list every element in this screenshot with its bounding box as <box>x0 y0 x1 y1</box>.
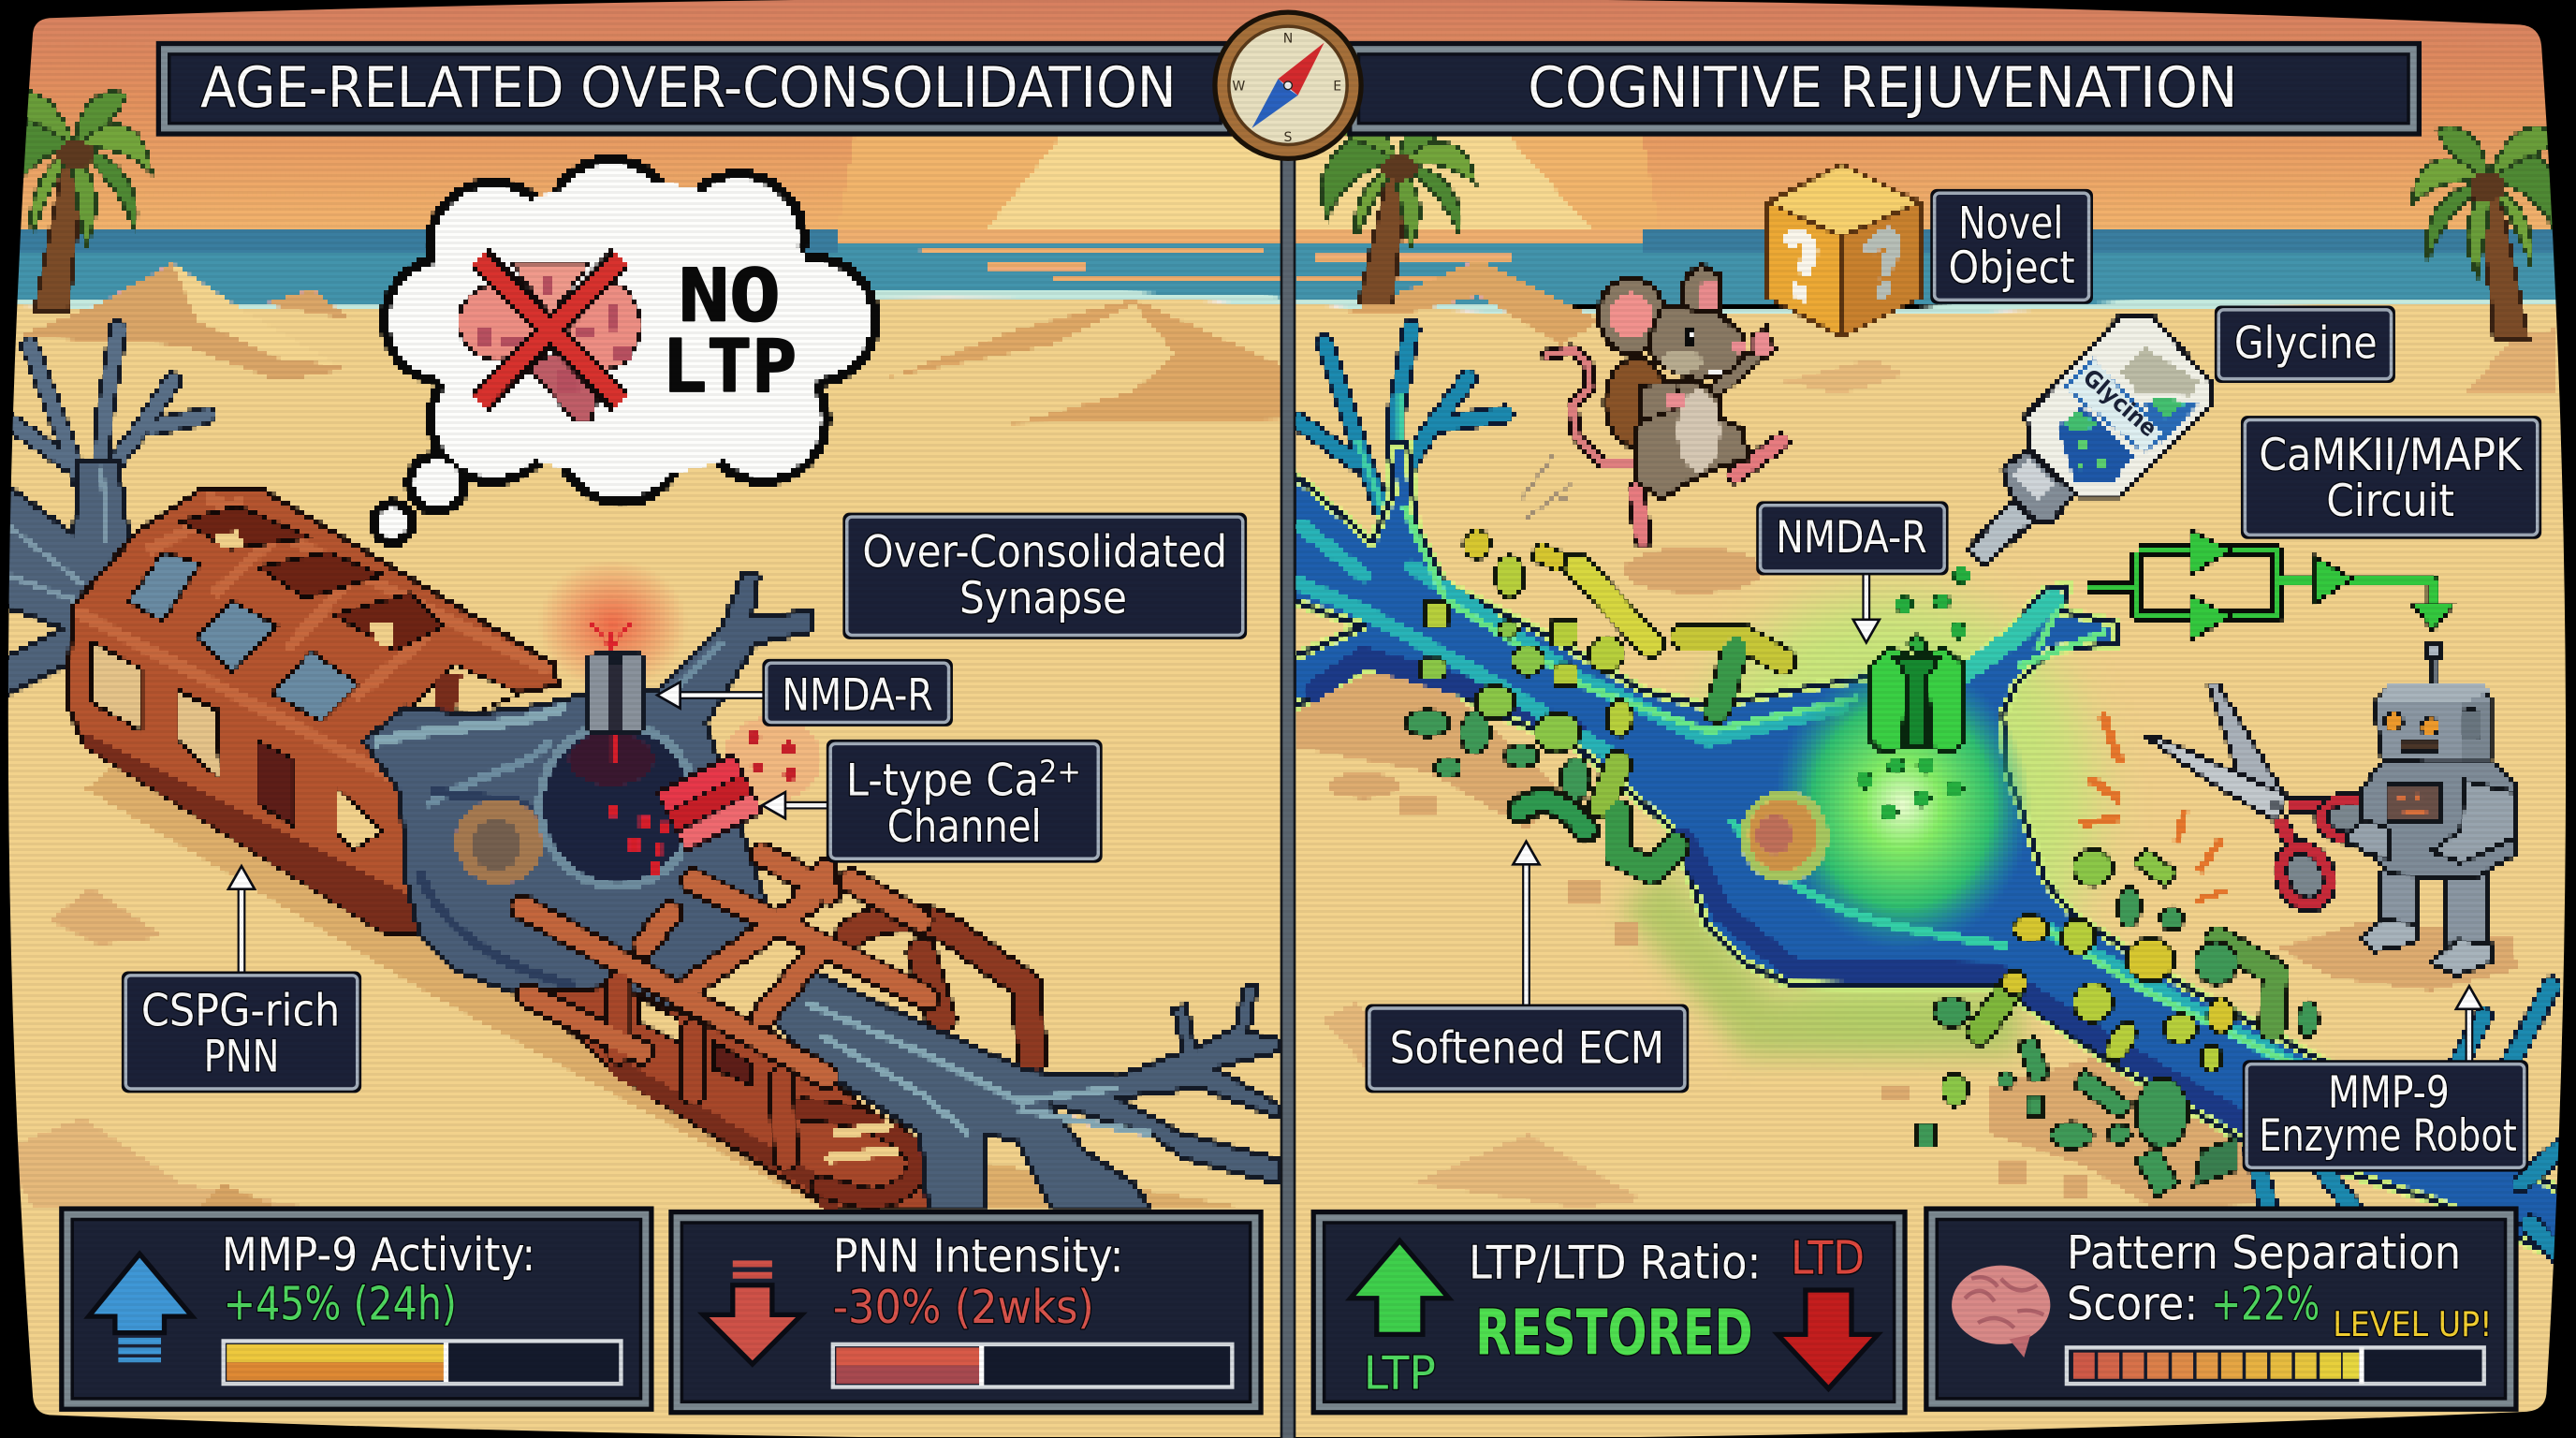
icon: red down arrow <box>703 1260 801 1364</box>
motion lines <box>1519 457 1569 518</box>
dark synapse dome <box>535 720 700 890</box>
panel: PNN intensity <box>668 1210 1264 1415</box>
MMP-9 progress bar <box>224 1341 621 1384</box>
cage highlights <box>76 496 550 779</box>
label: MMP-9 enzyme robot with arrow <box>2243 986 2528 1172</box>
left PNN cage, back section <box>67 490 559 932</box>
label: novel object <box>1930 189 2093 304</box>
cube question marks <box>1781 227 1901 302</box>
ratio heading: LTP/LTD Ratio: <box>1469 1236 1761 1290</box>
header: cognitive rejuvenation <box>1347 41 2422 137</box>
cage windows <box>91 506 520 850</box>
glycine bottle <box>1969 315 2213 565</box>
bottle label text: Glycine <box>2078 363 2162 442</box>
mouse arm <box>1719 352 1761 388</box>
label: L-type Ca channel with arrow <box>762 740 1103 863</box>
sparks <box>2080 712 2228 903</box>
robot legs <box>2361 871 2494 976</box>
restored status: RESTORED <box>1475 1296 1753 1369</box>
sky <box>0 0 2576 233</box>
header: age-related over-consolidation: AGE-RELATED OVER-CONSOLIDATION <box>200 56 1177 121</box>
left PNN cage, front rails <box>522 855 927 1159</box>
label: L-type Ca channel with arrow: Channel <box>887 801 1042 853</box>
score value: +22% <box>2211 1277 2320 1331</box>
crossed-out brain <box>459 258 640 420</box>
softened ECM fragments <box>1406 529 2318 1196</box>
label: L-type Ca channel with arrow: 2+ <box>1039 754 1081 790</box>
panel: LTP/LTD ratio <box>1311 1210 1908 1415</box>
icon: blue up arrow <box>89 1254 192 1333</box>
left dendrite tree <box>0 329 207 698</box>
label: L-type Ca channel with arrow: L-type Ca <box>846 756 1058 807</box>
mouse ears <box>1680 265 1721 313</box>
sea <box>0 230 2576 313</box>
L-type calcium channel <box>654 716 822 853</box>
mouse tail <box>1547 350 1634 463</box>
cage body <box>67 490 559 932</box>
icon: compass: E <box>1333 80 1341 95</box>
mouse with backpack <box>1519 265 1781 594</box>
label: CaMKII MAPK circuit: Circuit <box>2326 476 2454 527</box>
label: glycine: Glycine <box>2234 318 2378 370</box>
dunes <box>0 259 2556 1208</box>
PNN heading: PNN Intensity: <box>833 1229 1123 1284</box>
icon: green LTP arrow <box>1351 1240 1449 1334</box>
vertical divider <box>1281 144 1295 1438</box>
scissors <box>2147 683 2378 913</box>
left PNN cage, rear of front section <box>529 917 1032 1208</box>
cage lower dark band <box>85 733 416 932</box>
right dendrite tree <box>1298 329 1505 513</box>
icon: pink brain <box>1952 1266 2050 1357</box>
panel: MMP-9 activity <box>59 1206 654 1412</box>
label: CSPG-rich PNN with arrow: CSPG-rich <box>141 985 340 1036</box>
label: NMDA-R left with arrow <box>657 659 953 726</box>
NMDA receptor, left <box>537 559 688 736</box>
mystery cube <box>1767 165 1921 337</box>
label: softened ECM with arrow: Softened ECM <box>1390 1023 1664 1075</box>
PNN value: -30% (2wks) <box>833 1280 1094 1334</box>
CaMKII MAPK circuit <box>2088 529 2454 641</box>
right neuron body <box>1293 444 2576 1273</box>
mouse backpack <box>1605 359 1667 447</box>
sand <box>0 298 2576 1438</box>
label: novel object: Object <box>1949 242 2075 294</box>
label: MMP-9 enzyme robot with arrow: MMP-9 <box>2328 1067 2450 1119</box>
icon: compass: S <box>1284 130 1293 145</box>
NO LTP caption: NO <box>679 254 781 338</box>
large curled fragments <box>1519 567 2276 1032</box>
label: over-consolidated synapse: Synapse <box>959 573 1127 624</box>
MMP-9 value: +45% (24h) <box>224 1277 457 1331</box>
label: CSPG-rich PNN with arrow <box>122 866 361 1093</box>
LTD tag: LTD <box>1791 1230 1865 1284</box>
icon: compass: W <box>1232 80 1245 95</box>
icon: compass <box>1212 10 1364 161</box>
icon: compass: N <box>1283 32 1293 47</box>
cage ground shadow <box>85 723 1249 1208</box>
PNN progress bar <box>833 1344 1232 1387</box>
robot body <box>2361 763 2515 879</box>
right neuron glow <box>1643 592 2300 1101</box>
pattern heading: Pattern Separation <box>2067 1225 2461 1280</box>
icon: red LTD arrow <box>1778 1290 1878 1388</box>
mouse head <box>1647 306 1745 381</box>
label: softened ECM with arrow <box>1365 842 1689 1093</box>
label: CaMKII MAPK circuit <box>2241 416 2541 539</box>
header: age-related over-consolidation <box>156 41 1232 137</box>
icon: blue arrow tail bars <box>118 1338 161 1362</box>
label: novel object: Novel <box>1958 198 2063 250</box>
palm trees <box>0 92 2566 339</box>
left dendrite trunk and lower branches <box>768 973 1278 1208</box>
label: over-consolidated synapse: Over-Consolidated <box>862 527 1227 579</box>
label: MMP-9 enzyme robot with arrow: Enzyme Robot <box>2259 1110 2517 1162</box>
label: CaMKII MAPK circuit: CaMKII/MAPK <box>2259 430 2524 481</box>
robot head <box>2374 687 2491 766</box>
label: CSPG-rich PNN with arrow: PNN <box>204 1032 279 1083</box>
header: cognitive rejuvenation: COGNITIVE REJUVENATION <box>1528 56 2237 121</box>
NO LTP caption: LTP <box>662 325 797 409</box>
right NMDA receptor <box>1856 567 1969 820</box>
level up tag: LEVEL UP! <box>2333 1304 2492 1344</box>
panel: pattern separation <box>1924 1206 2519 1412</box>
right nucleus <box>1740 790 1828 883</box>
label: glycine <box>2215 306 2395 383</box>
NO LTP caption <box>662 254 797 409</box>
sand patches under fragments <box>1298 674 2517 1208</box>
sun <box>838 138 1660 230</box>
label: NMDA-R right with arrow: NMDA-R <box>1776 512 1927 564</box>
nucleus <box>455 799 544 884</box>
label: over-consolidated synapse <box>842 513 1247 639</box>
mouse body <box>1634 381 1749 500</box>
label: NMDA-R right with arrow <box>1756 501 1949 642</box>
left neuron soma <box>363 574 813 1019</box>
label: NMDA-R left with arrow: NMDA-R <box>782 669 933 721</box>
robot <box>2346 642 2515 976</box>
score label: Score: <box>2067 1277 2198 1331</box>
mouse feet <box>1636 442 1781 539</box>
LTP tag: LTP <box>1364 1345 1436 1400</box>
segmented progress bar <box>2067 1347 2484 1384</box>
dendrite lower right branches <box>2254 986 2576 1273</box>
thought bubble <box>368 154 881 548</box>
MMP-9 heading: MMP-9 Activity: <box>222 1227 535 1282</box>
